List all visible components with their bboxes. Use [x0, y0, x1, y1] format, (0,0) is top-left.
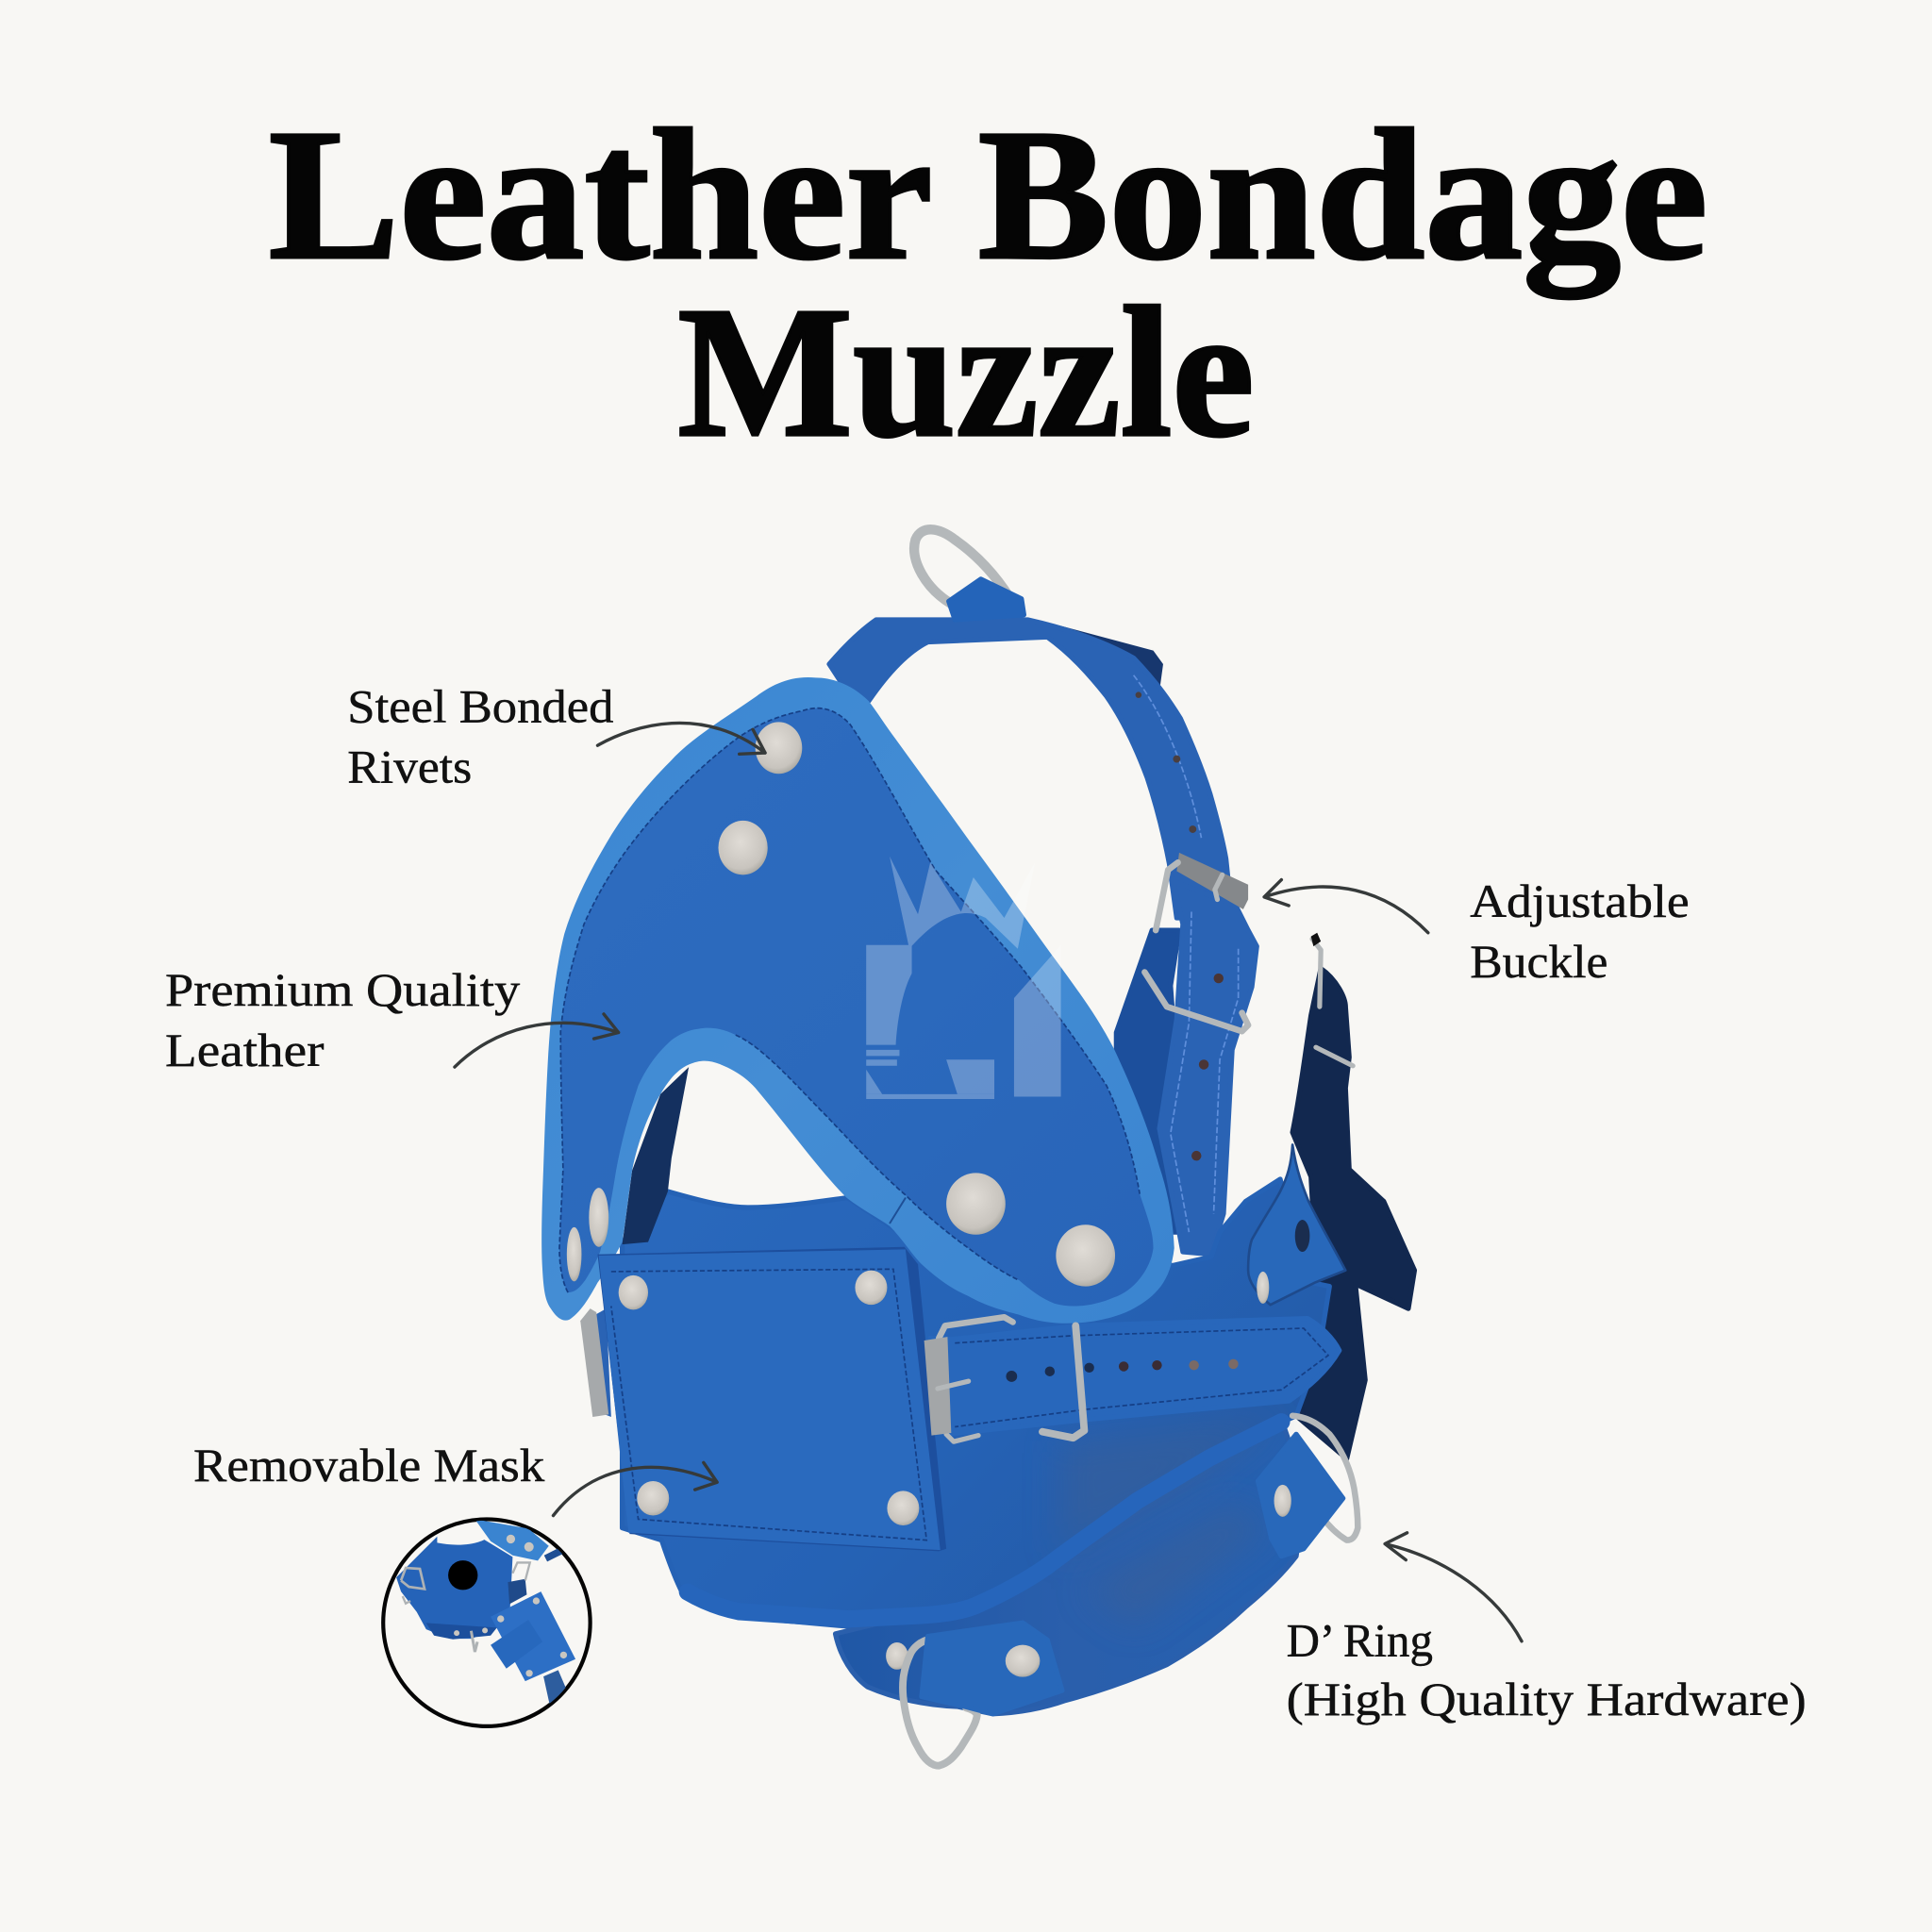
label: adjustable buckle: Buckle [1470, 936, 1607, 988]
label: adjustable buckle [1470, 875, 1690, 988]
inset circle: mask removed view [383, 1519, 591, 1726]
harness strap arching over the head [829, 579, 1232, 918]
label: D ring [1287, 1614, 1807, 1725]
chin cup [836, 1420, 1306, 1714]
arrow: to leather [455, 1014, 619, 1067]
label: removable mask: Removable Mask [193, 1440, 545, 1491]
soft shading on chin and body [1059, 1417, 1281, 1626]
watermark logo [866, 857, 1061, 1099]
left side buckle [580, 1308, 611, 1417]
title: Leather Bondage [269, 91, 1707, 299]
label: steel bonded rivets: Rivets [347, 741, 472, 792]
label: steel bonded rivets: Steel Bonded [347, 680, 614, 732]
seam in the flap border [890, 1198, 906, 1224]
back strap with dark underside and small buckle [1292, 933, 1414, 1458]
chin piping [688, 1422, 1281, 1619]
arrow: to mask [553, 1462, 717, 1516]
label: D ring: (High Quality Hardware) [1287, 1674, 1807, 1725]
label: premium quality leather [165, 964, 520, 1076]
label: D ring: D’ Ring [1287, 1614, 1433, 1666]
icon: strap buckle frame [939, 1317, 1013, 1338]
label: premium quality leather: Leather [165, 1024, 325, 1076]
arrow: to rivet [597, 723, 765, 754]
label: steel bonded rivets [347, 680, 614, 792]
muzzle product illustration [541, 529, 1414, 1766]
title [269, 91, 1707, 475]
icon: top D ring [914, 529, 1010, 604]
arrow: to buckle [1264, 880, 1428, 933]
adjustable side strap and buckle [1116, 853, 1257, 1255]
blinder flap with light border [541, 677, 1174, 1324]
icon: bottom D ring and tab [886, 1623, 1062, 1766]
back strap tab with hole and rivet [1248, 1144, 1345, 1305]
buckle strap across the muzzle [924, 1317, 1340, 1441]
title: Muzzle [677, 268, 1255, 475]
removable mask patch [597, 1247, 946, 1551]
lower muzzle body [623, 1179, 1329, 1626]
rivets on flap [567, 722, 1115, 1287]
dark gap at the left of the eye opening [623, 1067, 689, 1244]
arrow: to D ring [1385, 1533, 1522, 1641]
label: premium quality leather: Premium Quality [165, 964, 520, 1016]
icon: right D ring and tab [1258, 1416, 1357, 1557]
label: adjustable buckle: Adjustable [1470, 875, 1690, 927]
